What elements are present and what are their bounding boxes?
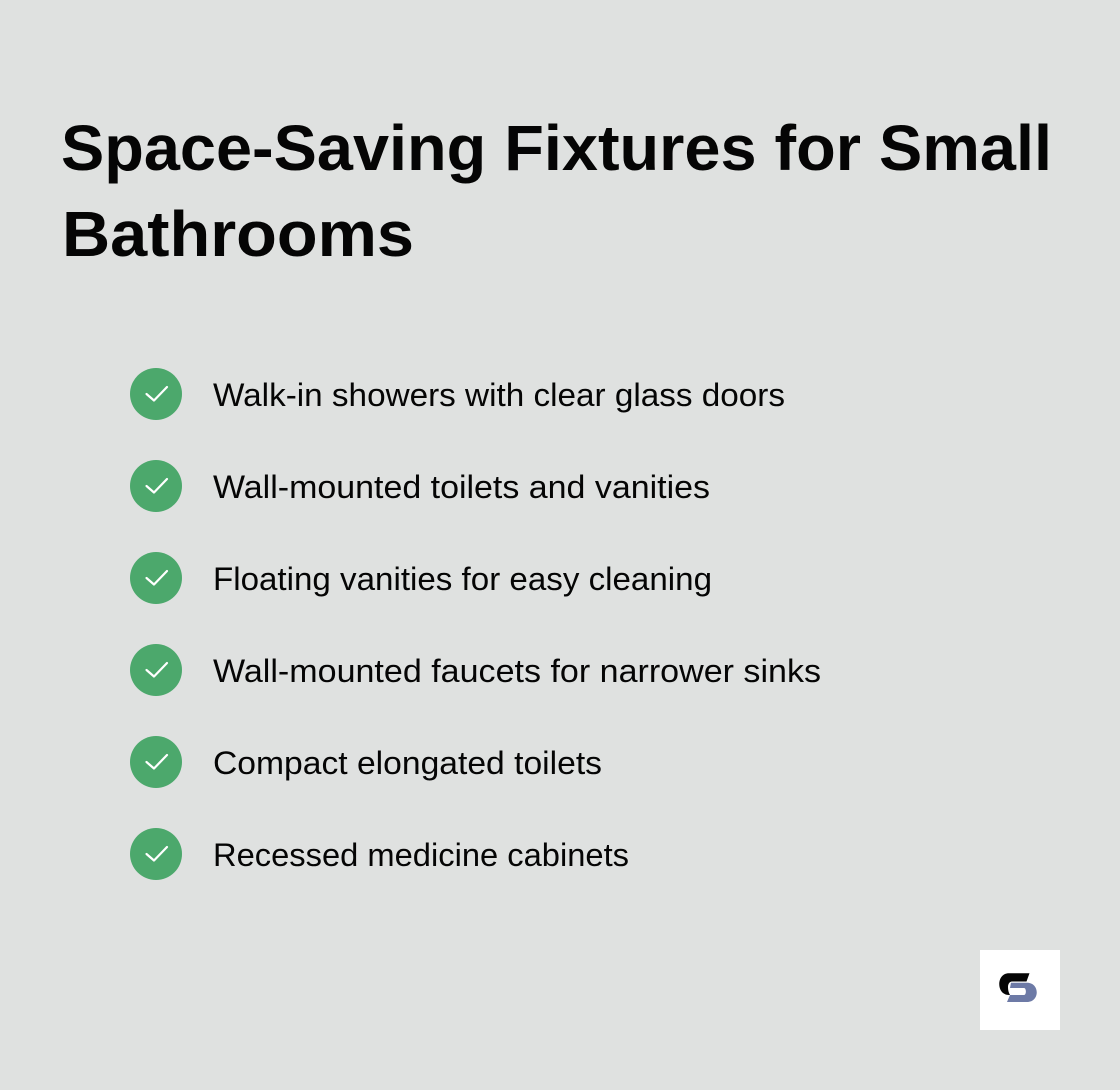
list item: floating vanities: Floating vanities for easy cleaning xyxy=(213,561,712,597)
list item: wall-mounted faucets: Wall-mounted faucets for narrower sinks xyxy=(213,653,821,689)
list item: walk-in showers: Walk-in showers with clear glass doors xyxy=(213,377,785,413)
list item: medicine cabinets xyxy=(130,828,629,880)
list item: wall-mounted toilets: Wall-mounted toilets and vanities xyxy=(213,469,710,505)
title: Space-Saving Fixtures for Small xyxy=(61,112,1052,184)
list item: floating vanities xyxy=(130,552,712,604)
list item: wall-mounted faucets xyxy=(130,644,821,696)
list item: walk-in showers xyxy=(130,368,785,420)
list item: wall-mounted toilets xyxy=(130,460,710,512)
list item: medicine cabinets: Recessed medicine cabinets xyxy=(213,837,629,873)
title xyxy=(61,112,1052,270)
checklist xyxy=(130,368,821,880)
list item: compact toilets: Compact elongated toilets xyxy=(213,745,602,781)
logo badge xyxy=(980,950,1060,1030)
title: Bathrooms xyxy=(62,198,414,270)
list item: compact toilets xyxy=(130,736,602,788)
